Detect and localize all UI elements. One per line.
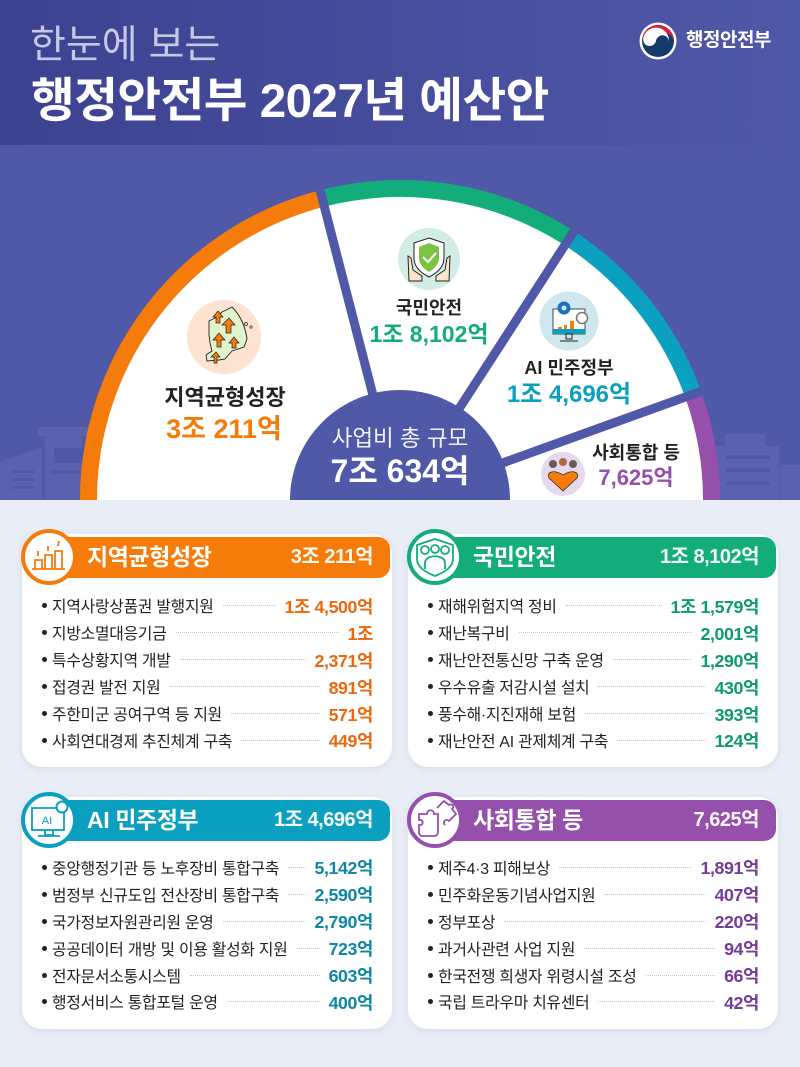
panel header: 국민안전	[473, 544, 556, 570]
label: 사회통합 등: 7,625억	[598, 465, 674, 490]
item list: 범정부 신규도입 전산장비 통합구축	[52, 888, 279, 905]
center total	[290, 390, 510, 610]
arc: 국민안전	[322, 188, 569, 238]
label: 사회통합 등	[592, 443, 680, 490]
ministry logo	[640, 22, 771, 60]
item list: 특수상황지역 개발	[52, 653, 171, 670]
label: 사회통합 등: 사회통합 등	[592, 443, 680, 463]
label: 국민안전	[369, 298, 489, 347]
item list: 과거사관련 사업 지원	[438, 942, 575, 959]
label: 지역균형성장: 지역균형성장	[164, 385, 286, 410]
panel: 사회통합 등	[408, 797, 778, 1029]
item list: 재해위험지역 정비	[438, 599, 557, 616]
item list: 1조	[348, 624, 373, 644]
item list: 주한미군 공여구역 등 지원	[52, 707, 222, 724]
item list	[428, 858, 759, 1013]
item list: 한국전쟁 희생자 위령시설 조성	[438, 968, 637, 986]
item list: 603억	[329, 966, 373, 986]
item list: 1조 1,579억	[671, 597, 759, 617]
panel header: 3조 211억	[291, 546, 373, 568]
panel header: 1조 4,696억	[274, 809, 373, 831]
label: AI 민주정부: 1조 4,696억	[507, 381, 631, 408]
item list: 2,371억	[315, 651, 373, 671]
item list: 407억	[715, 885, 759, 905]
panel header: 사회통합 등	[473, 807, 583, 833]
panel header	[42, 537, 390, 578]
item list: 풍수해·지진재해 보험	[438, 707, 576, 724]
item list: 지역사랑상품권 발행지원	[52, 599, 214, 616]
item list: 국가정보자원관리원 운영	[52, 915, 214, 932]
icon: shield and hands	[398, 228, 460, 290]
panel header	[428, 537, 776, 578]
label: AI 민주정부: AI 민주정부	[524, 358, 614, 378]
panel header: 1조 8,102억	[660, 546, 759, 568]
item list: 571억	[329, 704, 373, 724]
label: 지역균형성장: 3조 211억	[166, 414, 282, 444]
item list: 66억	[724, 966, 759, 986]
item list: 정부포상	[438, 915, 495, 932]
panel: 지역균형성장	[22, 534, 392, 767]
item list	[428, 597, 759, 751]
panel header	[428, 800, 776, 841]
item list: 1조 4,500억	[285, 597, 373, 617]
icon: AI monitor	[21, 792, 73, 848]
item list: 재난복구비	[438, 626, 510, 643]
segment dividers	[319, 186, 702, 500]
item list: 400억	[329, 993, 373, 1013]
item list: 우수유출 저감시설 설치	[438, 680, 589, 697]
icon: korea map with arrows	[187, 300, 261, 374]
item list: 723억	[329, 939, 373, 959]
item list: 제주4·3 피해보상	[438, 861, 550, 878]
panel header	[42, 800, 390, 841]
label: AI 민주정부	[507, 358, 631, 408]
arc: 지역균형성장	[88, 198, 322, 500]
arc: 사회통합 등	[693, 394, 712, 500]
item list	[42, 597, 373, 751]
panel: 국민안전	[408, 534, 778, 767]
item list: 449억	[329, 731, 373, 751]
item list: 지방소멸대응기금	[52, 626, 167, 643]
item list: 2,790억	[315, 912, 373, 932]
item list: 사회연대경제 추진체계 구축	[52, 734, 232, 751]
item list: 접경권 발전 지원	[52, 680, 161, 697]
item list: 220억	[715, 912, 759, 932]
hero background with budget semicircle	[0, 0, 800, 500]
item list: 재난안전 AI 관제체계 구축	[438, 734, 608, 751]
item list: 42억	[724, 993, 759, 1013]
center total: 사업비 총 규모	[332, 426, 468, 451]
icon: growth bars	[21, 529, 73, 585]
main title: 행정안전부 2027년 예산안	[31, 75, 549, 128]
panel header: AI 민주정부	[87, 807, 198, 833]
label: 국민안전: 국민안전	[396, 298, 462, 318]
item list: 1,290억	[701, 651, 759, 671]
item list: 민주화운동기념사업지원	[438, 888, 595, 905]
item list: 재난안전통신망 구축 운영	[438, 653, 604, 670]
panel: AI 민주정부	[22, 797, 392, 1029]
item list: 2,590억	[315, 885, 373, 905]
subtitle: 한눈에 보는	[30, 24, 220, 67]
ministry logo: 행정안전부	[686, 30, 771, 51]
item list: 94억	[724, 939, 759, 959]
item list: 2,001억	[701, 624, 759, 644]
item list: 공공데이터 개방 및 이용 활성화 지원	[52, 942, 288, 959]
center total: 7조 634억	[331, 453, 469, 489]
item list	[42, 858, 373, 1013]
item list: 행정서비스 통합포털 운영	[52, 995, 218, 1012]
item list: 430억	[715, 678, 759, 698]
panel header: 지역균형성장	[87, 544, 212, 570]
item list: 891억	[329, 678, 373, 698]
item list: 전자문서소통시스템	[52, 968, 181, 986]
icon: people and heart	[541, 452, 585, 496]
item list: 393억	[715, 704, 759, 724]
label: 국민안전: 1조 8,102억	[369, 321, 489, 347]
icon: people shield	[407, 529, 459, 585]
icon: puzzle	[407, 792, 459, 848]
pie disc	[88, 188, 712, 812]
item list: 5,142억	[315, 858, 373, 878]
item list: 1,891억	[701, 858, 759, 878]
panel header: 7,625억	[694, 809, 759, 831]
item list: 국립 트라우마 치유센터	[438, 995, 589, 1012]
icon: monitor with gears	[540, 292, 598, 350]
icon: AI monitor: AI	[42, 815, 52, 827]
header band	[0, 0, 800, 145]
item list: 중앙행정기관 등 노후장비 통합구축	[52, 861, 279, 878]
label: 지역균형성장	[164, 385, 286, 444]
item list: 124억	[715, 731, 759, 751]
arc: AI 민주정부	[569, 238, 693, 394]
